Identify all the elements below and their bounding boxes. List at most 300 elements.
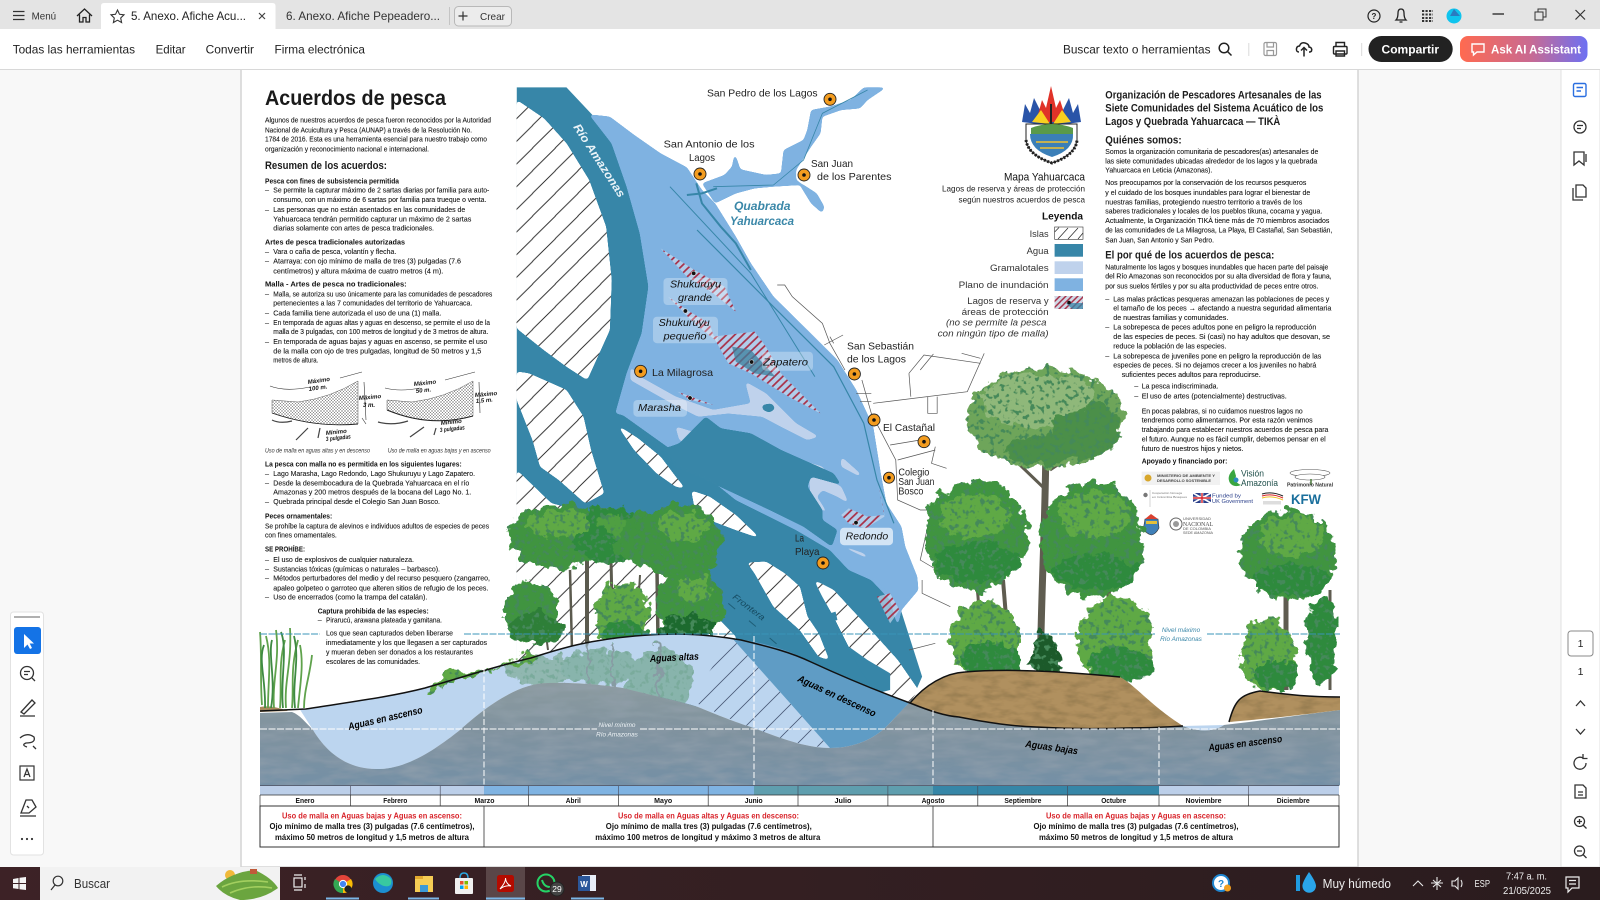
logo: UK Government: [1193, 493, 1253, 505]
left tool palette: [10, 612, 44, 855]
paragraph: el por que: En pocas palabras, si no cuidamos nuestros lagos no: [1142, 406, 1303, 415]
map: community labels: San Juan: [811, 158, 853, 170]
organization title: Siete Comunidades del Sistema Acuático de los: [1105, 103, 1323, 115]
paragraph: el por que: reduce la población de las especies.: [1113, 341, 1226, 350]
block: peces ornamentales: Peces ornamentales:: [265, 511, 332, 520]
month labels row: Febrero: [383, 798, 407, 805]
block: malla: malla de 3 pulgadas, con 100 metros de longitud y de 3 metros de altura.: [273, 327, 488, 336]
icon: avatar: [1446, 8, 1462, 24]
organization title: Lagos y Quebrada Yahuarcaca — TIKÀ: [1105, 115, 1280, 128]
rule: march to august: Uso de malla en Aguas altas y Aguas en descenso:: [618, 811, 799, 821]
map: river label: Río Amazonas: [570, 122, 627, 200]
sponsor logos: [1142, 468, 1334, 535]
month labels row: Junio: [745, 798, 763, 805]
water cross-section: rising and high water: [300, 634, 910, 769]
paragraph: quienes somos: Actualmente, la Organización TIKÀ tiene más de 70 miembros asociados: [1105, 216, 1330, 225]
heading: el por que: El por qué de los acuerdos de pesca:: [1105, 249, 1274, 261]
soil mound: center: [910, 670, 1183, 729]
map: community labels: Lagos: [689, 152, 715, 164]
icon: word: [578, 875, 596, 891]
icon: start: [13, 877, 26, 890]
block: especies prohibidas: [318, 606, 487, 666]
block: se prohibe: El uso de explosivos de cualquier naturaleza.: [273, 555, 414, 564]
map: community labels: La Milagrosa: [652, 367, 713, 379]
terrain rock layer: [260, 683, 1340, 786]
block: lugares: Desde la desembocadura de la Quebrada Yahuarcaca en el río: [273, 479, 469, 488]
icon: task view: [294, 875, 305, 890]
logo: Universidad Nacional: NACIONAL: [1183, 522, 1213, 528]
logo: Patrimonio Natural: [1287, 470, 1334, 488]
emblem: TIKÀ organization: [1022, 86, 1081, 163]
icon: word: W: [580, 880, 588, 889]
icon: print: [1334, 42, 1347, 56]
map: frontier dashed line: [728, 603, 871, 723]
map: lake labels: Marasha: [638, 403, 681, 414]
icon: edge: [373, 873, 393, 893]
month labels row: [260, 795, 1339, 806]
tool: highlight: [20, 700, 35, 716]
month labels row: Abril: [566, 798, 581, 805]
illustration: net for high water: 3 pulgadas: [326, 434, 352, 443]
map: lake point markers: [683, 271, 858, 525]
window controls: [1492, 9, 1585, 20]
poster: right text column: [1105, 89, 1332, 466]
menu items: Editar: [156, 42, 186, 56]
right sidebar background: [1561, 69, 1600, 867]
weather text: Muy húmedo: [1323, 877, 1391, 891]
block: subsistencia: –: [265, 185, 269, 194]
organization title: [1105, 89, 1323, 128]
active tab: [101, 3, 276, 29]
icon: comments: [1574, 121, 1586, 133]
rule: august to december: Uso de malla en Aguas bajas y Aguas en ascenso:: [1046, 811, 1226, 821]
block: se prohibe: SE PROHÍBE:: [265, 545, 305, 554]
map: community labels: de los Lagos: [847, 354, 906, 366]
create button: Crear: [480, 11, 505, 23]
organization title: Organización de Pescadores Artesanales de las: [1105, 89, 1322, 101]
rule: march to august: máximo 100 metros de longitud y máximo 3 metros de altura: [595, 832, 821, 842]
paragraph: quienes somos: [1105, 147, 1332, 244]
browser tab bar: [0, 0, 1600, 29]
block: se prohibe: [265, 545, 490, 602]
icon: chrome: [333, 875, 353, 893]
mesh rules table: [260, 806, 1339, 847]
map: dark river water: [517, 87, 922, 707]
logo: Ministerio de Ambiente: DESARROLLO SOSTENIBLE: [1157, 479, 1212, 483]
illustration: net for low water: Mínimo: [441, 419, 462, 427]
legend: islas: Islas: [1030, 229, 1049, 239]
windows taskbar: [0, 867, 1600, 900]
block: se prohibe: –: [265, 574, 269, 583]
month labels row: Marzo: [474, 798, 494, 805]
illustration: net for low water: Máximo: [475, 391, 498, 399]
label: maximum river level: Río Amazonas: [1160, 636, 1203, 643]
block: subsistencia: [265, 177, 490, 232]
paragraph: el por que: Las malas prácticas pesqueras amenazan las poblaciones de peces y: [1113, 294, 1330, 303]
month labels row: Mayo: [654, 798, 672, 805]
illustration: net for low water: Máximo: [414, 380, 437, 388]
legend: lagos de reserva: (no se permite la pesca: [946, 318, 1046, 328]
illustration: net for low water: 3 pulgadas: [440, 425, 466, 434]
paragraph: quienes somos: Nos preocupamos por la conservación de los recursos pesqueros: [1105, 178, 1307, 187]
paragraph: el por que: por sus suelos fértiles y por su alta productividad de peces entre otros.: [1105, 281, 1318, 290]
paragraph: el por que: el futuro. Aunque no es fácil cumplir, debemos pensar en el: [1142, 435, 1326, 444]
tool: more: [21, 838, 33, 840]
clock: 7:47 a. m.: [1506, 870, 1547, 882]
legend: lagos de reserva: Lagos de reserva y: [967, 296, 1049, 306]
map: community labels: Colegio: [898, 467, 930, 479]
trees: right large forest group: [923, 368, 1153, 700]
map: community labels: La: [795, 533, 804, 545]
intro paragraph: Nacional de Acuicultura y Pesca (AUNAP) a través de la Resolución No.: [265, 125, 472, 134]
block: subsistencia: consumo, con un máximo de 6 sartas por familia para trueque o venta.: [273, 195, 486, 204]
block: malla: En temporada de aguas bajas y aguas en ascenso, se permite el uso: [273, 337, 487, 346]
map: flood plain: [589, 114, 918, 627]
paragraph: el por que: La sobrepesca de juveniles pone en peligro la reproducción de las: [1113, 351, 1322, 360]
block: malla: Cada familia tiene autorizada el uso de una (1) malla.: [273, 309, 441, 318]
block: lugares: –: [265, 479, 269, 488]
legend: gramalotales: [990, 261, 1083, 274]
rule: january to march: Ojo mínimo de malla tres (3) pulgadas (7.6 centímetros),: [270, 821, 474, 831]
block: lugares: Amazonas y 200 metros después de la bocana del Lago No. 1.: [273, 488, 471, 497]
label: aguas en ascenso right: Aguas en ascenso: [1207, 734, 1283, 754]
title: Acuerdos de pesca: [265, 87, 446, 110]
soil mound: right: [1229, 691, 1340, 722]
map: lake labels: Shukuruyu: [659, 318, 710, 329]
map: lake labels: Shukuruyu: [670, 280, 721, 291]
logo: Ministerio de Ambiente: [1142, 472, 1220, 485]
heading: quienes somos: Quiénes somos:: [1105, 134, 1182, 146]
logo: Vision Amazonia: Visión: [1241, 468, 1264, 480]
map: Quebrada label: Quabrada: [734, 199, 791, 213]
illustration: net for high water: Máximo: [307, 377, 331, 386]
month labels row: Diciembre: [1277, 798, 1310, 805]
tool: freehand: [20, 735, 36, 749]
trees: far right forest group: [1240, 495, 1350, 711]
block: se prohibe: Métodos perturbadores del medio y del recurso pesquero (zangarreo,: [273, 574, 490, 583]
legend: agua: [1027, 244, 1083, 257]
icon: AI panel: [1574, 84, 1586, 96]
maximum river level dashed line: [260, 633, 1340, 635]
icon: acrobat: [486, 867, 525, 900]
label: aguas en descenso: Aguas en descenso: [795, 673, 877, 720]
block: artes tradicionales: –: [265, 247, 269, 256]
document page: [241, 69, 1358, 867]
menu items: Todas las herramientas: [13, 42, 135, 56]
block: malla: En temporada de aguas altas y aguas en descenso, se permite el uso de la: [273, 318, 490, 327]
map: community labels: San Antonio de los: [664, 139, 755, 151]
map: lake labels: pequeño: [662, 332, 707, 342]
paragraph: el por que: el tamaño de los peces → afectando a nuestra seguridad alimentaria: [1113, 304, 1331, 313]
legend: islas: [1030, 227, 1083, 239]
map: Quebrada Yahuarcaca stream: [702, 87, 886, 213]
block: subsistencia: Las personas que no están asentados en las comunidades de: [273, 205, 465, 214]
block: artes tradicionales: –: [265, 257, 269, 266]
logo: Universidad Nacional: UNIVERSIDAD: [1183, 517, 1211, 521]
block: lugares: La pesca con malla no es permitida en los siguientes lugares:: [265, 460, 462, 469]
search box: Buscar: [74, 877, 110, 891]
icon: search: [1219, 43, 1232, 56]
map: roads: [777, 285, 984, 650]
paragraph: el por que: trabajando para establecer nuestros acuerdos de pesca para: [1142, 425, 1328, 434]
block: especies prohibidas: Captura prohibida de las especies:: [318, 606, 429, 615]
minimum river level dashed line: [260, 728, 1340, 730]
menu label: Menú: [32, 10, 56, 22]
block: artes tradicionales: Vara o caña de pesca, volantín y flecha.: [273, 247, 396, 256]
paragraph: el por que: de las especies de peces. Si (casi) no hay adultos que desovan, se: [1113, 332, 1330, 341]
map: islands: [516, 102, 917, 702]
map: Quebrada label: [730, 199, 794, 228]
button: compartir: Compartir: [1382, 42, 1439, 56]
block: subsistencia: diarias solamente con artes de pesca tradicionales.: [273, 223, 434, 232]
map: community labels: Playa: [795, 546, 820, 558]
month boundary dashed lines: [484, 636, 1159, 785]
block: artes tradicionales: Atarraya: con ojo mínimo de malla de tres (3) pulgadas (7.6: [273, 257, 461, 266]
rule: january to march: máximo 50 metros de longitud y 1,5 metros de altura: [275, 832, 469, 842]
paragraph: el por que: –: [1105, 351, 1109, 360]
map: frontier label: Frontera: [731, 592, 767, 623]
logo: small government crest: [1143, 490, 1188, 507]
paragraph: el por que: tendremos como alimentarnos. Por esta razón venimos: [1142, 416, 1313, 425]
paragraph: el por que: especies de peces. Si no dejamos crecer a los juveniles no habrá: [1113, 360, 1316, 369]
paragraph: el por que: –: [1105, 294, 1109, 303]
map: community labels: San Pedro de los Lagos: [707, 88, 818, 100]
paragraph: el por que: La pesca indiscriminada.: [1142, 381, 1218, 390]
map: community labels: de los Parentes: [817, 171, 892, 183]
block: artes tradicionales: Artes de pesca tradicionales autorizadas: [265, 237, 405, 246]
block: subsistencia: Se permite la capturar máximo de 2 sartas diarias por familia para auto-: [273, 185, 490, 194]
page number box: [1568, 631, 1593, 656]
illustration: net for low water: 1,5 m.: [476, 398, 493, 405]
tool: sign: [20, 800, 36, 816]
map: Quebrada label: Yahuarcaca: [730, 214, 794, 228]
label: minimum river level: Nivel mínimo: [599, 722, 636, 729]
map: Yahuarcaca lakes system: [510, 80, 984, 723]
label: aguas altas: Aguas altas: [649, 651, 699, 665]
rule: august to december: [1034, 811, 1238, 842]
legend subtitle: [942, 184, 1085, 205]
intro paragraph: 1784 de 2016. Esta es una herramienta esencial para nuestro trabajo como: [265, 135, 487, 144]
block: malla: –: [265, 337, 269, 346]
block: especies prohibidas: escolares de las comunidades.: [326, 657, 420, 666]
legend: lagos de reserva: con ningún tipo de malla): [938, 329, 1049, 339]
month labels row: Noviembre: [1186, 798, 1222, 805]
legend subtitle: según nuestros acuerdos de pesca: [958, 195, 1085, 205]
month labels row: Septiembre: [1004, 798, 1042, 805]
vegetation along riverbank: [425, 652, 540, 692]
rule: march to august: [595, 811, 821, 842]
paragraph: el por que: [1105, 262, 1332, 453]
block: malla: –: [265, 309, 269, 318]
legend: plano de inundacion: Plano de inundación: [959, 280, 1049, 290]
block: se prohibe: –: [265, 593, 269, 602]
logo: UK Government: Funded by: [1212, 494, 1241, 500]
block: lugares: Lago Marasha, Lago Redondo, Lago Shukuruyu y Lago Zapatero.: [273, 469, 475, 478]
paragraph: el por que: de nuestras familias y comunidades.: [1113, 313, 1228, 322]
map: community labels: [652, 88, 935, 558]
paragraph: quienes somos: nuestras familias, protegiendo nuestro territorio a través de los: [1105, 197, 1303, 206]
logo: Ministerio de Ambiente: MINISTERIO DE AMBIENTE Y: [1157, 474, 1216, 478]
trees: left forest group: [503, 504, 724, 651]
block: lugares: –: [265, 497, 269, 506]
icon: help tray: ?: [1218, 879, 1224, 890]
icon: help: ?: [1372, 12, 1377, 21]
block: se prohibe: –: [265, 555, 269, 564]
legend: plano de inundacion: [959, 278, 1083, 291]
running app indicators: [326, 898, 604, 900]
block: peces ornamentales: [265, 511, 489, 540]
legend: lagos de reserva: áreas de protección: [962, 307, 1049, 317]
map: lake labels: [638, 280, 889, 542]
icon: bookmark: [1574, 152, 1586, 165]
paragraph: quienes somos: San Juan, San Antonio y San Pedro.: [1105, 235, 1214, 244]
month labels row: Enero: [296, 798, 314, 805]
block: especies prohibidas: inmediatamente y los que llegasen a ser capturados: [326, 638, 487, 647]
paragraph: el por que: suficientes peces adultos para reproducirse.: [1122, 370, 1261, 379]
map: community labels: El Castañal: [883, 422, 935, 434]
map: lake labels: Redondo: [846, 532, 889, 542]
button: compartir: [1368, 36, 1453, 62]
paragraph: el por que: –: [1134, 391, 1138, 400]
month labels row: Octubre: [1101, 798, 1126, 805]
icon: zoom out: [1574, 846, 1586, 858]
icon: page view: [1575, 785, 1586, 798]
paragraph: quienes somos: Yahuarcaca en Leticia (Amazonas).: [1105, 166, 1212, 175]
search box: [40, 867, 280, 900]
heading: resumen: Resumen de los acuerdos:: [265, 160, 387, 172]
block: artes tradicionales: centímetros) y altura máxima de cuatro metros (4 m).: [273, 266, 443, 275]
label: minimum river level: Río Amazonas: [596, 732, 639, 738]
map: gramalotales: [630, 367, 886, 573]
block: peces ornamentales: Se prohíbe la captura de alevinos e individuos adultos de especies de peces: [265, 521, 489, 530]
icon: humidity: [1296, 872, 1316, 893]
rule: march to august: Ojo mínimo de malla tres (3) pulgadas (7.6 centímetros),: [606, 821, 812, 831]
grass at left edge: [260, 628, 312, 708]
map: community markers: [635, 93, 930, 569]
block: subsistencia: Pesca con fines de subsistencia permitida: [265, 177, 400, 186]
block: malla: Malla, se autoriza su uso únicamente para las comunidades de pescadores: [273, 289, 493, 298]
logo: Universidad Nacional: [1170, 517, 1214, 535]
legend: gramalotales: Gramalotales: [990, 263, 1049, 273]
map: lake label boxes: [633, 278, 893, 545]
paragraph: el por que: –: [1105, 322, 1109, 331]
caption: net high water: Uso de malla en aguas altas y en descenso: [265, 447, 370, 454]
illustration: net for high water: [270, 372, 382, 443]
map: community labels: San Juan: [898, 476, 935, 488]
icon: whatsapp: 29: [552, 884, 562, 894]
block: especies prohibidas: y mueran deben ser donados a los restaurantes: [326, 647, 473, 656]
logo: KFW: KFW: [1291, 491, 1322, 507]
inactive tab: 6. Anexo. Afiche Pepeadero...: [286, 9, 440, 23]
button: ask AI assistant: [1460, 36, 1588, 62]
menu items: Firma electrónica: [274, 42, 365, 56]
block: artes tradicionales: [265, 237, 461, 275]
logo: Universidad Nacional: SEDE AMAZONIA: [1183, 531, 1214, 535]
intro paragraph: Algunos de nuestros acuerdos de pesca fueron reconocidos por la Autoridad: [265, 116, 491, 125]
logo: small government crest: en Colombia Bosques: [1152, 495, 1188, 499]
paragraph: quienes somos: de las comunidades de La Milagrosa, La Playa, El Castañal, San Sebastián,: [1105, 225, 1332, 234]
map: community labels: San Sebastián: [847, 340, 914, 352]
block: lugares: Quebrada principal desde el Colegio San Juan Bosco.: [273, 497, 440, 506]
caption: net low water: Uso de malla en aguas bajas y en ascenso: [388, 447, 491, 454]
clock: [1503, 870, 1551, 897]
label: minimum river level: [596, 722, 639, 738]
icon: bell: [1396, 9, 1406, 22]
create button: [450, 6, 512, 26]
icon: zoom in: [1574, 816, 1586, 828]
icon: page up and down: [1576, 701, 1585, 734]
small pool in terrain: [1183, 725, 1224, 730]
month labels row: Julio: [834, 798, 852, 805]
paragraph: el por que: Naturalmente los lagos y bosques inundables que hacen parte del paisaje: [1105, 262, 1328, 271]
intro paragraph: [265, 116, 491, 153]
label: maximum river level: Nivel máximo: [1162, 627, 1201, 634]
icon: whatsapp: [538, 874, 564, 896]
icon: upload: [1296, 43, 1312, 56]
map legend: [938, 172, 1086, 339]
month colour strip: [260, 786, 1339, 795]
legend: lagos de reserva: [938, 296, 1083, 339]
system tray icons: [1413, 877, 1462, 890]
block: especies prohibidas: Los que sean capturados deben liberarse: [326, 629, 453, 638]
tool: select: [14, 627, 41, 654]
block: se prohibe: apaleo golpeteo o garroteo que alteren sitios de refugio de los peces.: [273, 583, 488, 592]
map: dark lakes: [625, 403, 841, 547]
right side panel icons: [1568, 84, 1593, 858]
map: lake labels: Zapatero: [762, 358, 808, 369]
poster: left text column: [265, 87, 498, 666]
block: subsistencia: Yahuarcaca tendrán permitido capturar un máximo de 2 sartas: [273, 214, 472, 223]
rule: january to march: Uso de malla en Aguas bajas y Aguas en ascenso:: [282, 811, 462, 821]
icon: home: [77, 9, 92, 22]
icon: pages: [1573, 185, 1586, 200]
tool: comment: [20, 666, 35, 681]
map: thin streams: [670, 90, 894, 523]
map: community labels: Bosco: [898, 486, 924, 498]
map: Zapatero lake: [732, 347, 775, 377]
block: malla: Malla - Artes de pesca no tradicionales:: [265, 279, 407, 288]
block: malla: [265, 279, 493, 364]
map: reserve areas: [661, 248, 900, 623]
illustration: net for high water: 100 m.: [308, 384, 328, 393]
block: especies prohibidas: Pirarucú, arawana plateada y gamitana.: [326, 615, 442, 624]
logo: Universidad Nacional: DE COLOMBIA: [1183, 527, 1212, 531]
paragraph: quienes somos: Somos la organización comunitaria de pescadores(as) artesanales de: [1105, 147, 1318, 156]
paragraph: el por que: –: [1134, 381, 1138, 390]
logo: Germany: [1262, 493, 1283, 504]
map: small lake on island: [830, 612, 890, 693]
block: se prohibe: –: [265, 564, 269, 573]
block: lugares: –: [265, 469, 269, 478]
illustration: net for high water: Mínimo: [326, 429, 347, 437]
rule: august to december: Ojo mínimo de malla tres (3) pulgadas (7.6 centímetros),: [1034, 821, 1238, 831]
river band in falling water: [732, 638, 909, 748]
icon: menu: [13, 12, 24, 20]
illustration: net for low water: 50 m.: [416, 387, 432, 395]
block: subsistencia: –: [265, 205, 269, 214]
application toolbar: [0, 29, 1600, 70]
rule: january to march: [270, 811, 474, 842]
block: malla: pertenecientes a las 7 comunidades del territorio de Yahuarcaca.: [273, 299, 472, 308]
icon: help tray: [1213, 875, 1231, 892]
soil mound: left: [260, 706, 288, 712]
label: aguas bajas: Aguas bajas: [1024, 739, 1079, 757]
rule: august to december: máximo 50 metros de longitud y 1,5 metros de altura: [1039, 832, 1233, 842]
illustration: net for high water: Máximo: [359, 394, 382, 402]
logo: Patrimonio Natural: Patrimonio Natural: [1287, 482, 1334, 488]
block: malla: de la malla con ojo de tres pulgadas, longitud de 50 metros y 1,5: [273, 346, 481, 355]
paragraph: el por que: La sobrepesca de peces adultos pone en peligro la reproducción: [1113, 322, 1316, 331]
